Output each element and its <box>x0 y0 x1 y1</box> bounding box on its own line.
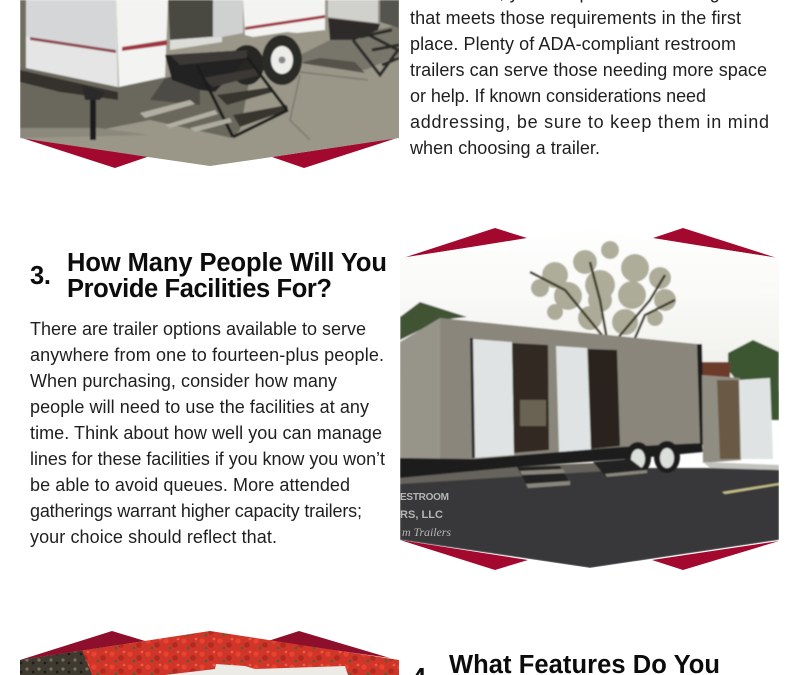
section 3 heading: How Many People Will You <box>67 249 387 277</box>
text block: section 3 paragraph: gatherings warrant higher capacity trailers; <box>30 501 362 521</box>
photo section 2: white restroom trailer with steps <box>20 0 400 170</box>
section 3 heading <box>67 249 387 303</box>
accent: red bottom-left triangle <box>400 540 528 570</box>
accent: red top-right triangle <box>268 631 390 658</box>
text block: section 2 closing paragraph: that meets those requirements in the first <box>410 8 741 28</box>
photo section 3: grey restroom trailer <box>390 220 790 570</box>
text block: section 3 paragraph: anywhere from one to fourteen-plus people. <box>30 345 384 365</box>
text block: section 3 paragraph: be able to avoid queues. More attended <box>30 475 350 495</box>
accent: red bottom-left triangle <box>22 138 150 168</box>
section 3 number: 3. <box>30 262 51 290</box>
text block: section 2 closing paragraph: place. Plenty of ADA-compliant restroom <box>410 34 736 54</box>
accent: red top-right triangle <box>653 228 777 258</box>
accent: red bottom-right triangle <box>652 541 779 570</box>
accent: red top-left triangle <box>403 228 527 258</box>
photo watermark text: m Trailers <box>402 525 451 539</box>
photo section 4: trailer among red flowers <box>20 628 400 675</box>
photo watermark text <box>400 492 451 539</box>
photo: flowers and trailer roof <box>20 628 400 675</box>
photo watermark text: RS, LLC <box>400 509 443 521</box>
section 3 heading: Provide Facilities For? <box>67 275 332 303</box>
text block: section 2 closing paragraph <box>409 0 769 158</box>
accent: red top-left triangle <box>20 631 145 660</box>
text block: section 3 paragraph: time. Think about how well you can manage <box>30 423 382 443</box>
text block: section 3 paragraph: lines for these facilities if you know you won’t <box>30 449 385 469</box>
text block: section 2 closing paragraph: trailers can serve those needing more space <box>410 60 767 80</box>
text block: section 3 paragraph: people will need to use the facilities at any <box>30 397 369 417</box>
photo: grey trailer <box>400 240 779 568</box>
text block: section 3 paragraph: your choice should reflect that. <box>30 527 277 547</box>
text block: section 2 closing paragraph: or help. If known considerations need <box>410 86 706 106</box>
text block: section 3 paragraph <box>30 319 385 547</box>
text block: section 2 closing paragraph: when choosing a trailer. <box>409 138 600 158</box>
accent: red bottom-right triangle <box>272 138 397 168</box>
photo: white trailer <box>20 0 400 170</box>
text block: section 3 paragraph: There are trailer options available to serve <box>30 319 366 339</box>
photo watermark text: ESTROOM <box>400 492 449 503</box>
text block: section 2 closing paragraph: addressing, be sure to keep them in mind <box>410 112 769 132</box>
text block: section 3 paragraph: When purchasing, consider how many <box>30 371 337 391</box>
